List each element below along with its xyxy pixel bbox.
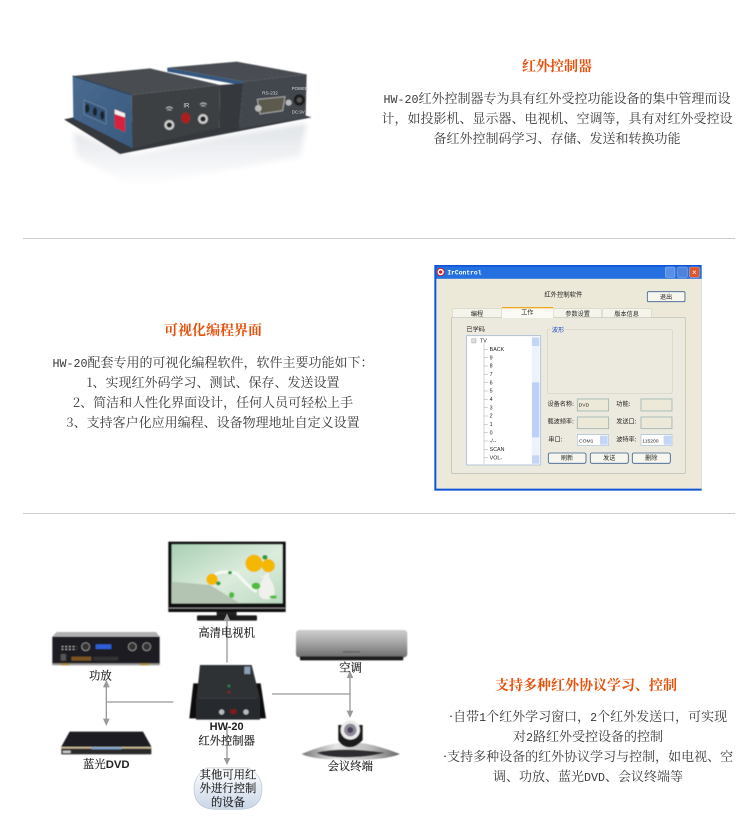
illustration: HW-20 device photo: DC:9V	[292, 109, 305, 114]
software screenshot: IrControl window: 2	[490, 414, 493, 420]
software screenshot: IrControl window: 版本信息	[614, 309, 639, 318]
label: 功放: 功放	[89, 668, 112, 684]
software screenshot: IrControl window: 发送口:	[616, 417, 637, 426]
icon: air conditioner	[296, 630, 407, 660]
software screenshot: IrControl window: 0	[490, 430, 493, 436]
text block: protocol features: ·支持多种设备的红外协议学习与控制，如电视、空	[443, 746, 733, 765]
illustration: HW-20 device photo	[64, 60, 312, 170]
text block: software features: 1、实现红外码学习、测试、保存、发送设置	[86, 372, 340, 391]
icon: blu-ray DVD player	[61, 732, 151, 754]
callout: other IR devices: 其他可用红	[200, 766, 256, 782]
text block: product intro: HW-20红外控制器专为具有红外受控功能设备的集中管理而设	[383, 88, 731, 107]
heading: 可视化编程界面: 可视化编程界面	[164, 320, 262, 340]
software screenshot: IrControl window: DVD	[579, 402, 590, 408]
software screenshot: IrControl window: 设备名称:	[547, 399, 574, 408]
heading: 支持多种红外协议学习、控制: 支持多种红外协议学习、控制	[495, 675, 677, 695]
software screenshot: IrControl window: ×	[692, 268, 697, 277]
software screenshot: IrControl window: 波特率:	[616, 435, 637, 444]
software screenshot: IrControl window: 9	[490, 355, 493, 361]
icon: amplifier	[52, 632, 160, 665]
text block: software features: HW-20配套专用的可视化编程软件，软件主要功能如下：	[52, 352, 374, 371]
callout: other IR devices	[194, 766, 262, 810]
icon: HW-20 controller	[189, 665, 266, 720]
software screenshot: IrControl window: 4	[490, 397, 493, 403]
text block: software features: 2、简洁和人性化界面设计，任何人员可轻松上手	[73, 392, 353, 411]
connector lines and arrows	[103, 613, 353, 765]
software screenshot: IrControl window: 1	[490, 422, 493, 428]
label: 会议终端: 会议终端	[328, 758, 373, 774]
illustration: HW-20 device photo: RS-232	[262, 90, 278, 95]
callout: other IR devices: 的设备	[211, 794, 246, 810]
software screenshot: IrControl window: 删除	[645, 453, 657, 462]
software screenshot: IrControl window: 载波频率:	[547, 417, 574, 426]
software screenshot: IrControl window: 串口:	[548, 435, 563, 444]
text block: software features: 3、支持客户化应用编程、设备物理地址自定义设置	[66, 412, 360, 431]
label: HW-20: HW-20	[210, 721, 244, 733]
text block: product intro: 计，如投影机、显示器、电视机、空调等，具有对红外受控设	[381, 108, 732, 127]
icon: television	[168, 542, 286, 621]
label: 红外控制器: 红外控制器	[198, 733, 256, 749]
text block: product intro	[381, 88, 732, 147]
software screenshot: IrControl window: 115200	[642, 438, 659, 444]
label: 蓝光DVD: 蓝光DVD	[83, 756, 130, 772]
icon: conference terminal	[302, 720, 400, 760]
software screenshot: IrControl window: SCAN	[490, 447, 505, 453]
software screenshot: IrControl window: -/--	[490, 439, 497, 445]
callout: other IR devices: 外进行控制	[200, 780, 256, 796]
text block: product intro: 备红外控制码学习、存储、发送和转换功能	[433, 128, 680, 147]
software screenshot: IrControl window: 已学码	[466, 325, 485, 334]
software screenshot: IrControl window: 工作	[521, 308, 533, 317]
illustration: HW-20 device photo: IR	[183, 104, 190, 110]
software screenshot: IrControl window: 发送	[603, 453, 615, 462]
text block: software features	[52, 352, 374, 431]
text block: protocol features	[443, 706, 733, 785]
software screenshot: IrControl window: 8	[490, 364, 493, 370]
label: 空调: 空调	[339, 659, 362, 675]
software screenshot: IrControl window: 红外控制软件	[544, 290, 583, 299]
label: 高清电视机: 高清电视机	[198, 624, 255, 640]
software screenshot: IrControl window: TV	[480, 339, 487, 345]
text block: protocol features: 对2路红外受控设备的控制	[513, 726, 663, 745]
software screenshot: IrControl window: 6	[490, 380, 493, 386]
software screenshot: IrControl window: 5	[490, 389, 493, 395]
software screenshot: IrControl window: 编程	[471, 309, 483, 318]
software screenshot: IrControl window: COM1	[579, 438, 594, 444]
heading: 红外控制器: 红外控制器	[522, 56, 592, 76]
software screenshot: IrControl window: 退出	[660, 292, 672, 301]
illustration: HW-20 device photo: POWER	[292, 86, 308, 91]
software screenshot: IrControl window: 3	[490, 405, 493, 411]
software screenshot: IrControl window: 参数设置	[565, 309, 590, 318]
software screenshot: IrControl window: 7	[490, 372, 493, 378]
software screenshot: IrControl window: BACK	[490, 347, 505, 353]
software screenshot: IrControl window: IrControl	[447, 270, 482, 277]
text block: protocol features: 调、功放、蓝光DVD、会议终端等	[493, 766, 683, 785]
software screenshot: IrControl window: 功能:	[616, 399, 631, 408]
text block: protocol features: ·自带1个红外学习窗口，2个红外发送口，可实现	[449, 706, 727, 725]
software screenshot: IrControl window: 波形	[552, 325, 564, 334]
software screenshot: IrControl window: VOL-	[490, 455, 502, 461]
software screenshot: IrControl window: 刷新	[561, 453, 573, 462]
